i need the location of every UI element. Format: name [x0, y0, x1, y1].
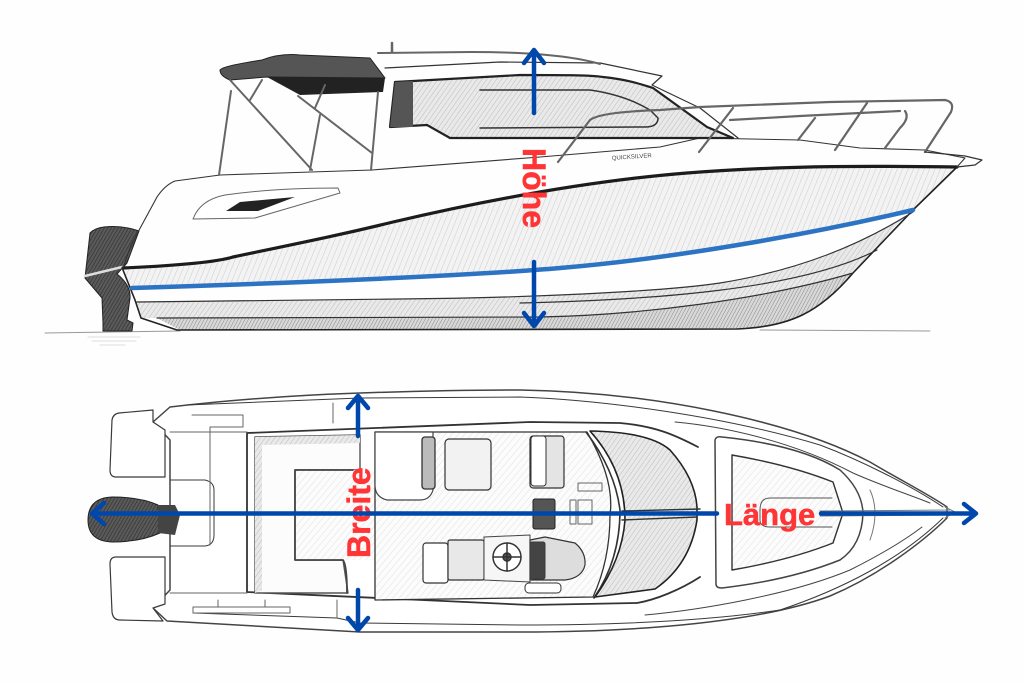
helm deck: [375, 432, 611, 600]
second upper seat: [530, 436, 564, 488]
chine lines: [137, 212, 913, 318]
hull deck plan: [153, 390, 947, 632]
upper swim platform: [110, 410, 165, 477]
width label: Breite: [341, 467, 377, 558]
brand: QUICKSILVER: [612, 153, 653, 162]
bow locker: [760, 498, 832, 527]
motor clamp band: [85, 267, 122, 276]
bow rails: [558, 100, 952, 162]
water reflection: [88, 337, 140, 345]
hull outline: [123, 167, 957, 330]
rail post: [391, 43, 393, 52]
seat white back: [531, 436, 546, 486]
steering wheel: [493, 543, 521, 571]
dash controls: [570, 483, 602, 524]
hull side hatched panel: [123, 166, 957, 288]
console dark block: [533, 499, 555, 529]
engine top: [88, 497, 160, 542]
foredeck fan: [590, 431, 697, 597]
lower bench back: [423, 543, 448, 583]
width arrow down: [348, 590, 368, 630]
blue stripe: [132, 210, 913, 288]
sheer line black: [123, 166, 957, 268]
vent slot: [226, 197, 295, 211]
canopy frame: [219, 80, 378, 175]
upper seat cushion: [445, 439, 491, 490]
cockpit floor: [255, 435, 360, 593]
lower swim platform: [110, 557, 165, 621]
dark window part: [390, 81, 413, 127]
cabin window: [390, 75, 733, 138]
canopy top: [220, 55, 385, 80]
bow hatch surround: [715, 437, 863, 588]
top view of boat: [88, 390, 955, 632]
width arrow up: [348, 396, 368, 436]
length label: Länge: [724, 497, 815, 532]
canopy under: [267, 77, 385, 95]
windscreen arc: [586, 432, 620, 598]
transom details: [170, 403, 337, 618]
upper seat back: [422, 437, 435, 489]
outboard motor side: [85, 226, 139, 331]
floor hatch: [295, 470, 375, 560]
length arrow right: [821, 504, 976, 523]
c-seat outline: [295, 470, 353, 593]
transom and deck outline: [123, 138, 965, 268]
fan center line: [622, 509, 700, 520]
side vent: [193, 188, 340, 219]
keel dark hatch: [157, 273, 853, 330]
height label: Höhe: [516, 148, 552, 228]
helm seat dark: [530, 542, 545, 579]
side view of boat: [45, 43, 982, 345]
outer gunwale: [187, 397, 943, 625]
lower bench seat: [448, 540, 484, 580]
waterline: [45, 330, 930, 333]
side decks: [247, 422, 700, 605]
helm footrest: [525, 583, 561, 593]
helm seat: [530, 537, 585, 580]
cockpit shaded side: [255, 435, 360, 593]
bow hatch panel: [732, 455, 843, 570]
roof rail: [378, 52, 600, 64]
transom well: [170, 480, 214, 546]
height arrow up: [524, 50, 544, 113]
engine bracket: [158, 505, 180, 535]
hard top cabin: [385, 62, 738, 138]
upper seat base: [375, 432, 433, 500]
inner deck lines: [645, 422, 930, 615]
bow fitting: [925, 152, 982, 167]
helm console: [484, 535, 530, 582]
lower hull band: [137, 216, 905, 318]
height arrow down: [524, 262, 544, 326]
inner window line: [480, 90, 658, 128]
anchor line: [820, 490, 955, 540]
length arrow left: [92, 503, 717, 524]
